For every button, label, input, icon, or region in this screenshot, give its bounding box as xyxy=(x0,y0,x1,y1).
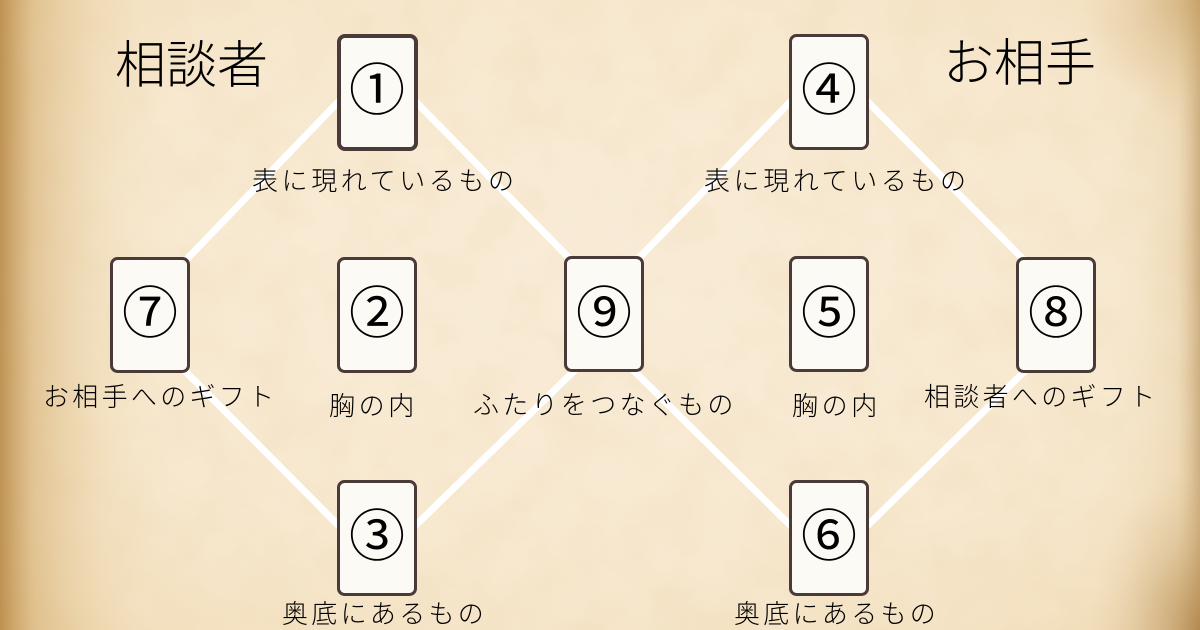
label: card 3: 奥底にあるもの xyxy=(282,599,487,629)
card 7 xyxy=(112,258,188,372)
card 8: ⑧ xyxy=(1028,282,1084,345)
card 4 xyxy=(790,36,868,148)
card 1: ① xyxy=(349,59,405,122)
heading: お相手: お相手 xyxy=(943,35,1096,92)
label: card 8: 相談者へのギフト xyxy=(924,382,1158,412)
card 2: ② xyxy=(349,282,405,345)
card 9 xyxy=(566,258,642,370)
label: card 9: ふたりをつなぐもの xyxy=(473,390,737,420)
card 5 xyxy=(790,258,868,370)
card 6 xyxy=(790,482,868,594)
card 1 xyxy=(339,36,416,149)
card 8 xyxy=(1018,258,1094,372)
label: card 1: 表に現れているもの xyxy=(252,166,518,196)
label: card 2: 胸の内 xyxy=(329,391,418,421)
heading: 相談者: 相談者 xyxy=(115,37,268,94)
card 5: ⑤ xyxy=(801,282,857,345)
card 3 xyxy=(338,482,416,594)
label: card 6: 奥底にあるもの xyxy=(734,599,939,629)
card 3: ③ xyxy=(349,505,405,568)
card 4: ④ xyxy=(801,59,857,122)
card 2 xyxy=(338,258,416,372)
card 6: ⑥ xyxy=(801,505,857,568)
label: card 4: 表に現れているもの xyxy=(704,166,970,196)
card 7: ⑦ xyxy=(122,282,178,345)
connector lines: diamond links between cards xyxy=(180,100,1030,527)
label: card 7: お相手へのギフト xyxy=(43,382,277,412)
card 9: ⑨ xyxy=(576,282,632,345)
label: card 5: 胸の内 xyxy=(792,391,881,421)
